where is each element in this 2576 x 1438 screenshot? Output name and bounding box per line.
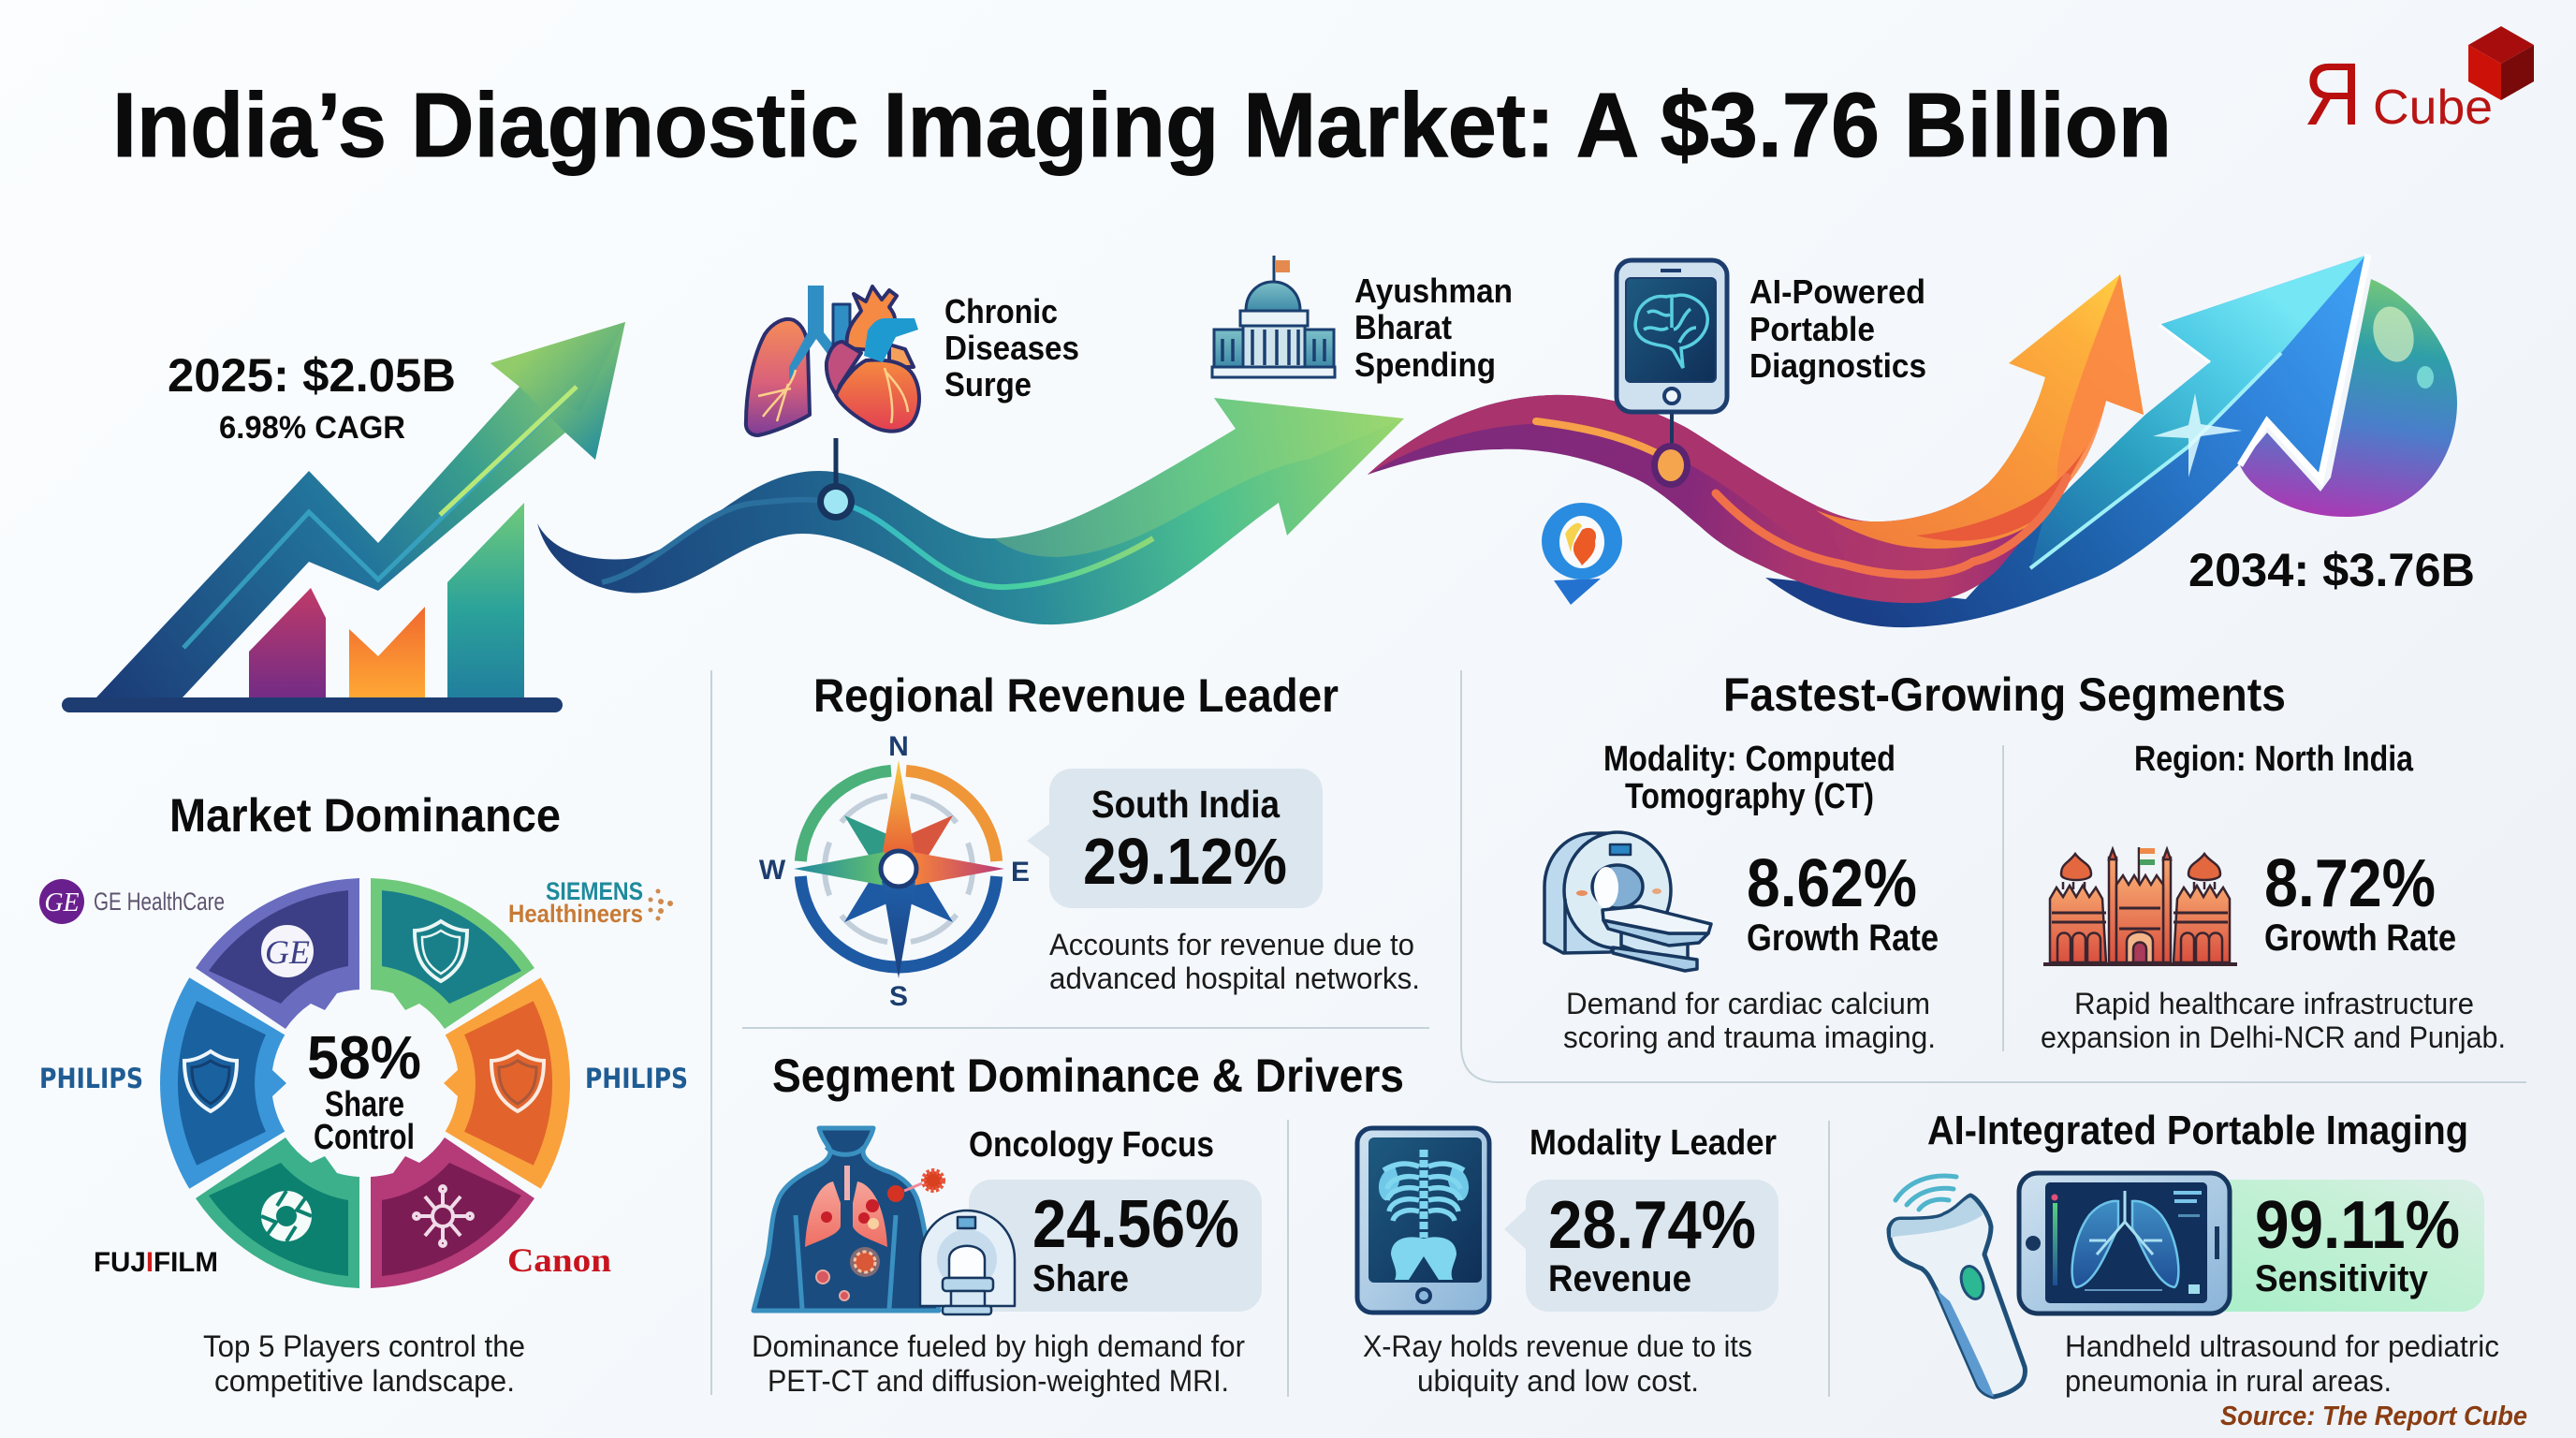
icon: tablet with brain	[1617, 260, 1727, 412]
description: North India	[2041, 987, 2506, 1054]
heading: fastest-growing segments: Fastest-Growing Segments	[1723, 668, 2286, 721]
start value label: 2025: $2.05B	[168, 349, 456, 402]
brand: Philips right: PHILIPS	[585, 1063, 688, 1094]
end value label: 2034: $3.76B	[2188, 544, 2475, 596]
brand: GE HealthCare: GE	[44, 888, 80, 917]
stat callout: South India 29.12%	[1027, 769, 1323, 908]
icon: shield orange	[491, 1051, 544, 1111]
brand: Siemens Healthineers: SIEMENS	[546, 877, 643, 905]
icon: molecule network	[414, 1186, 473, 1246]
icon: shield blue	[184, 1051, 237, 1111]
description: North India: expansion in Delhi-NCR and Punjab.	[2041, 1020, 2506, 1054]
panel: AI-integrated portable imaging	[1889, 1108, 2499, 1398]
stat callout: South India 29.12%: South India	[1091, 783, 1281, 826]
brand: Canon: Canon	[507, 1241, 611, 1279]
milestone label: AI-powered: AI-Powered	[1749, 272, 1925, 311]
subheading: modality CT: Tomography (CT)	[1625, 777, 1874, 816]
icon: compass	[759, 731, 1030, 1012]
stat callout: oncology share: Share	[1032, 1258, 1129, 1299]
stat: North India growth rate	[2264, 846, 2456, 959]
icon: handheld ultrasound probe	[1889, 1176, 2025, 1397]
milestone label: chronic diseases: Chronic	[944, 292, 1058, 330]
milestone label: chronic diseases: Surge	[944, 365, 1032, 404]
start value label	[168, 349, 456, 446]
stat callout: sensitivity: Sensitivity	[2255, 1258, 2429, 1299]
icon: GE emblem: GE	[265, 933, 310, 971]
source note: Source: The Report Cube	[2220, 1401, 2527, 1431]
subheading: modality CT: Modality: Computed	[1603, 740, 1895, 779]
subheading: modality CT	[1603, 740, 1895, 816]
brand: GE HealthCare: GE HealthCare	[94, 888, 225, 916]
center label: 58% share control: Control	[314, 1118, 415, 1157]
description: X-ray	[1363, 1329, 1752, 1398]
stat callout: oncology share: 24.56%	[1032, 1187, 1239, 1262]
description: CT: Demand for cardiac calcium	[1566, 987, 1930, 1020]
panel: market dominance	[39, 789, 688, 1398]
stat: CT growth rate	[1747, 846, 1939, 959]
icon: compass: E	[1011, 857, 1030, 888]
heading: AI-integrated portable imaging: AI-Integrated Portable Imaging	[1927, 1108, 2468, 1153]
milestone label: chronic diseases: Diseases	[944, 329, 1079, 367]
icon: shield teal	[415, 921, 467, 981]
brand: GE HealthCare	[39, 879, 225, 924]
subheading: modality leader: Modality Leader	[1530, 1123, 1777, 1163]
description: regional revenue: advanced hospital networks.	[1049, 961, 1420, 995]
panel: fastest-growing segments	[1544, 668, 2506, 1054]
description: oncology: Dominance fueled by high demand for	[752, 1329, 1245, 1363]
description: market dominance: Top 5 Players control the	[203, 1329, 525, 1363]
stat callout: X-ray revenue	[1504, 1180, 1778, 1312]
brand: Philips left: PHILIPS	[39, 1063, 143, 1094]
logo: RCube: Cube	[2373, 81, 2493, 135]
description: X-ray: ubiquity and low cost.	[1417, 1364, 1699, 1398]
milestone marker: chronic diseases	[817, 438, 855, 521]
milestone label: Ayushman Bharat: Ayushman	[1354, 271, 1513, 310]
icon: compass: N	[888, 731, 909, 762]
growth ribbon: teal to green arrow	[537, 398, 1404, 624]
panel: regional revenue leader	[759, 669, 1420, 1012]
icon: location chat pin	[1542, 503, 1622, 605]
stat callout: sensitivity: 99.11%	[2255, 1188, 2460, 1263]
milestone label: AI-powered	[1749, 272, 1926, 385]
growth ribbon: purple to orange arrow	[1368, 274, 2144, 603]
icon: compass: W	[759, 855, 786, 886]
icon: lungs and heart	[746, 286, 919, 435]
stat callout: South India 29.12%: 29.12%	[1083, 825, 1287, 898]
description: market dominance: competitive landscape.	[214, 1364, 515, 1398]
description: oncology: PET-CT and diffusion-weighted MRI.	[768, 1364, 1229, 1398]
milestone label: Ayushman Bharat: Spending	[1354, 345, 1496, 384]
title: India’s Diagnostic Imaging Market: A $3.76 Billion	[112, 74, 2172, 176]
milestone label: chronic diseases	[944, 292, 1079, 404]
subheading: region north india: Region: North India	[2134, 740, 2414, 779]
brand: Siemens Healthineers: Healthineers	[508, 900, 643, 928]
growth ribbon: final blue arrow	[1765, 255, 2368, 627]
icon: X-ray tablet	[1357, 1128, 1489, 1313]
icon: GE emblem	[260, 924, 315, 978]
description: X-ray: X-Ray holds revenue due to its	[1363, 1329, 1752, 1363]
heading: regional revenue leader: Regional Revenue Leader	[813, 669, 1339, 722]
center label: 58% share control: Share	[325, 1085, 404, 1124]
stat: North India growth rate: Growth Rate	[2264, 917, 2456, 959]
brand: Siemens Healthineers	[508, 877, 673, 928]
heading: market dominance: Market Dominance	[169, 789, 561, 842]
center label: 58% share control	[307, 1023, 421, 1157]
start value label: 6.98% CAGR	[219, 410, 405, 446]
icon: lung scan tablet	[2019, 1173, 2230, 1313]
growth orb behind final arrow	[2240, 279, 2457, 517]
icon: compass: S	[889, 981, 908, 1012]
description: CT	[1563, 987, 1936, 1054]
milestone label: Ayushman Bharat	[1354, 271, 1513, 384]
subheading: oncology focus: Oncology Focus	[969, 1125, 1214, 1165]
brand: Fujifilm: FUJIFILM	[94, 1247, 218, 1278]
icon: PET-CT scanner	[920, 1211, 1015, 1314]
icon: human torso with tumours	[754, 1128, 943, 1311]
description: CT: scoring and trauma imaging.	[1563, 1020, 1936, 1054]
description: AI portable: Handheld ultrasound for pediatric	[2065, 1329, 2499, 1363]
icon: camera aperture	[261, 1191, 312, 1241]
description: AI portable: pneumonia in rural areas.	[2065, 1364, 2392, 1398]
description: North India: Rapid healthcare infrastructure	[2074, 987, 2474, 1020]
heading: segment dominance and drivers: Segment Dominance & Drivers	[772, 1049, 1404, 1102]
milestone label: AI-powered: Portable	[1749, 310, 1875, 348]
center label: 58% share control: 58%	[307, 1023, 421, 1092]
donut chart: top 5 players share	[160, 878, 570, 1288]
description: market dominance	[203, 1329, 525, 1398]
description: regional revenue: Accounts for revenue due to	[1049, 928, 1414, 961]
stat: CT growth rate: Growth Rate	[1747, 917, 1939, 959]
description: AI portable	[2065, 1329, 2499, 1398]
milestone label: Ayushman Bharat: Bharat	[1354, 308, 1452, 346]
stat callout: X-ray revenue: Revenue	[1548, 1258, 1691, 1299]
panel: segment dominance and drivers	[752, 1049, 1778, 1398]
icon: government building	[1212, 256, 1335, 377]
growth chart icon: start of journey	[62, 322, 625, 712]
description: oncology	[752, 1329, 1245, 1398]
stat callout: oncology share	[969, 1180, 1262, 1312]
icon: Red Fort	[2043, 847, 2237, 964]
icon: CT scanner	[1544, 832, 1711, 971]
stat: CT growth rate: 8.62%	[1747, 846, 1917, 921]
logo: RCube: Я	[2304, 45, 2362, 144]
stat callout: X-ray revenue: 28.74%	[1548, 1188, 1756, 1263]
logo: RCube	[2304, 26, 2534, 144]
milestone marker: portable diagnostics	[1651, 412, 1690, 488]
milestone label: AI-powered: Diagnostics	[1749, 346, 1926, 385]
description: regional revenue	[1049, 928, 1420, 995]
stat callout: sensitivity	[2190, 1180, 2484, 1312]
stat: North India growth rate: 8.72%	[2264, 846, 2436, 921]
